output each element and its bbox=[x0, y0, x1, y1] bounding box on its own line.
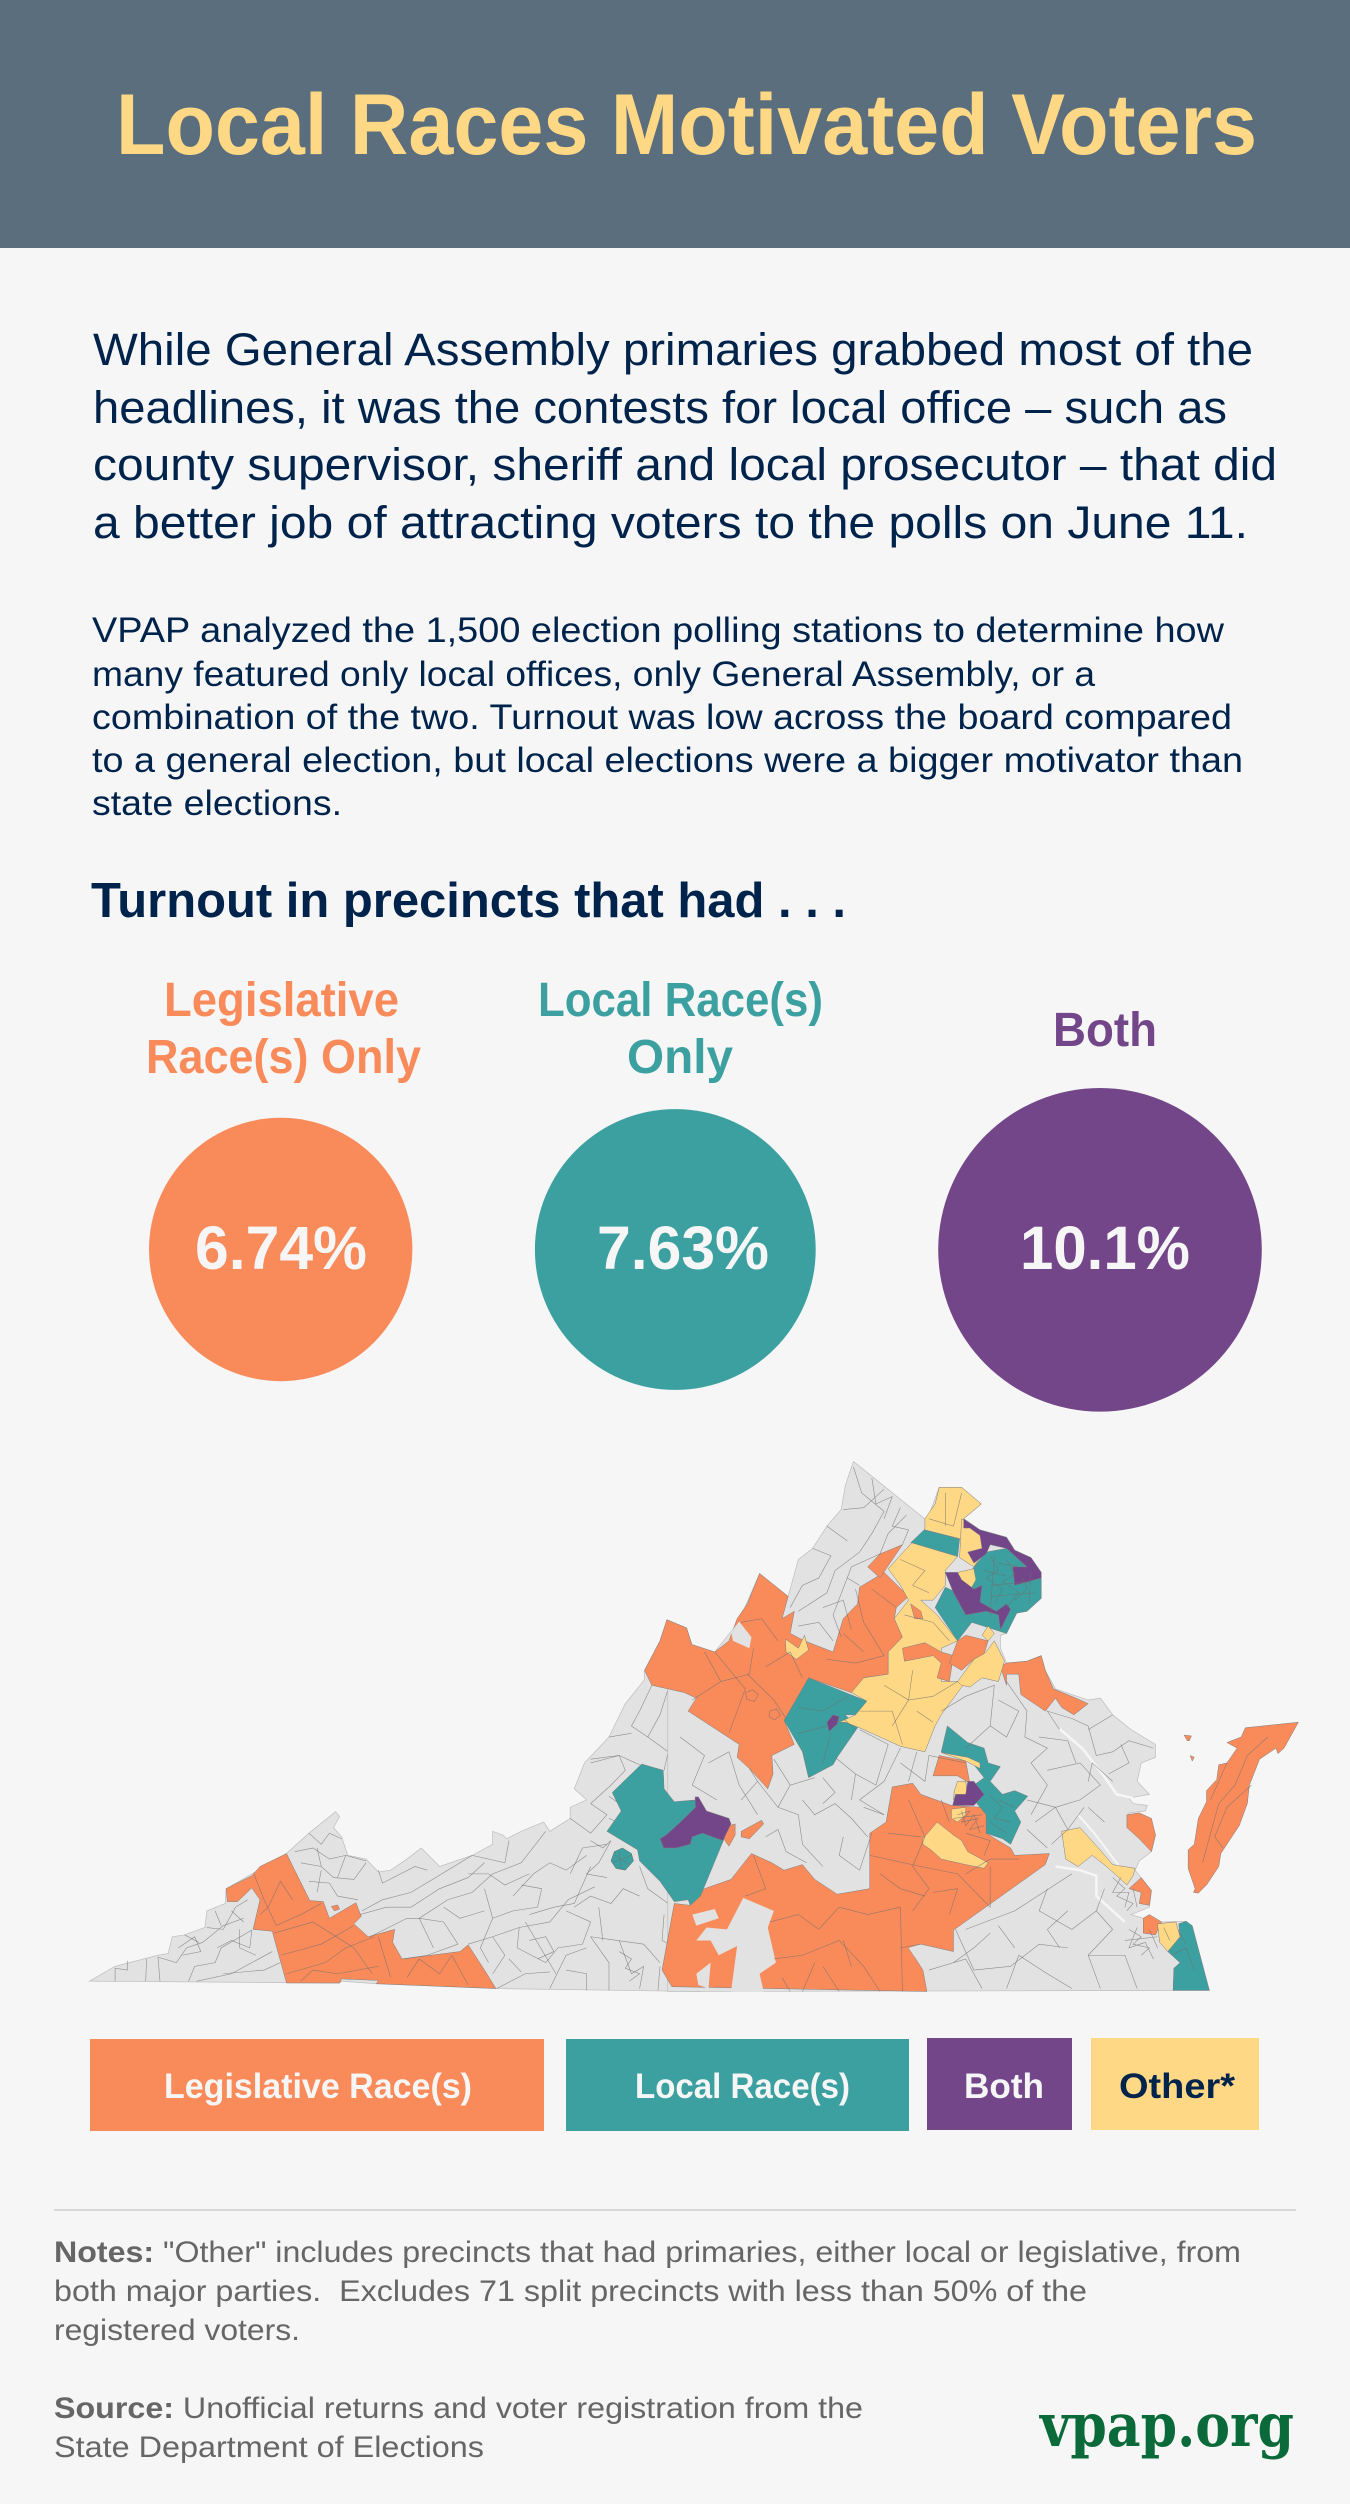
title: Local Races Motivated Voters bbox=[116, 77, 1257, 173]
region: base west bbox=[89, 1620, 700, 1992]
circle: 6.74% bbox=[149, 1118, 412, 1381]
region: legislative over other bbox=[902, 1604, 988, 1682]
logo: vpap.org: vpap.org bbox=[1038, 2391, 1294, 2461]
stat: both bbox=[938, 1004, 1262, 1412]
region: legislative races bbox=[644, 1545, 1298, 1992]
source: State Department of Elections bbox=[54, 2431, 484, 2464]
legend: other: Other* bbox=[1119, 2067, 1235, 2106]
label: local bbox=[538, 974, 823, 1084]
eastern half of the state bbox=[607, 1461, 1298, 1992]
methodology paragraph: state elections. bbox=[92, 784, 342, 823]
region: gray pockets in southside bbox=[692, 1622, 923, 1992]
intro paragraph bbox=[93, 324, 1277, 548]
methodology paragraph: combination of the two. Turnout was low across the board compared bbox=[92, 698, 1232, 737]
source: Source: Unofficial returns and voter registration from the bbox=[54, 2392, 863, 2425]
precinct lines east bbox=[680, 1467, 1268, 1992]
region: water rivers bbox=[1056, 1729, 1133, 1922]
intro paragraph: a better job of attracting voters to the polls on June 11. bbox=[93, 497, 1248, 548]
notes bbox=[54, 2236, 1241, 2347]
legend: other bbox=[1091, 2038, 1259, 2130]
region: base east bbox=[668, 1461, 1209, 1992]
notes: both major parties. Excludes 71 split precincts with less than 50% of the bbox=[54, 2275, 1087, 2308]
notes: Notes: "Other" includes precincts that had primaries, either local or legislative, from bbox=[54, 2236, 1241, 2269]
circle: 10.1% bbox=[938, 1088, 1262, 1412]
intro paragraph: While General Assembly primaries grabbed most of the bbox=[93, 324, 1253, 375]
value: 6.74%: 6.74% bbox=[195, 1214, 367, 1282]
legend: both: Both bbox=[964, 2067, 1044, 2106]
stat: local races only bbox=[535, 974, 823, 1390]
methodology paragraph: many featured only local offices, only General Assembly, or a bbox=[92, 655, 1096, 694]
intro paragraph: headlines, it was the contests for local office – such as bbox=[93, 382, 1227, 433]
legend: both bbox=[927, 2038, 1072, 2130]
label: local: Local Race(s) bbox=[538, 974, 823, 1027]
methodology paragraph: VPAP analyzed the 1,500 election polling stations to determine how bbox=[92, 611, 1225, 650]
source bbox=[54, 2392, 863, 2464]
label: legislative: Legislative bbox=[164, 974, 399, 1027]
region: other races bbox=[785, 1487, 1180, 1952]
region: both races bbox=[660, 1519, 1041, 1848]
region: local dot bbox=[611, 1848, 633, 1870]
methodology paragraph bbox=[92, 611, 1243, 823]
legend: legislative races bbox=[90, 2039, 544, 2131]
footer divider bbox=[54, 2209, 1296, 2211]
section heading: Turnout in precincts that had . . . bbox=[91, 874, 846, 928]
legend: legislative races: Legislative Race(s) bbox=[164, 2067, 472, 2106]
legend bbox=[90, 2038, 1259, 2131]
label: local: Only bbox=[627, 1031, 733, 1084]
map of Virginia precincts bbox=[89, 1461, 1298, 1992]
legend: local races bbox=[566, 2039, 909, 2131]
value: 7.63%: 7.63% bbox=[597, 1214, 769, 1282]
label: both: Both bbox=[1053, 1004, 1157, 1057]
stat: legislative races only bbox=[146, 974, 421, 1381]
notes: registered voters. bbox=[54, 2314, 300, 2347]
circle: 7.63% bbox=[535, 1109, 816, 1390]
region: local races bbox=[607, 1529, 1209, 1990]
header banner bbox=[0, 0, 1350, 248]
precinct lines west bbox=[115, 1637, 700, 1990]
label: legislative bbox=[146, 974, 421, 1084]
region: legislative southwest bbox=[226, 1854, 496, 1989]
methodology paragraph: to a general election, but local elections were a bigger motivator than bbox=[92, 741, 1243, 780]
label: legislative: Race(s) Only bbox=[146, 1031, 421, 1084]
legend: local races: Local Race(s) bbox=[635, 2067, 850, 2106]
western half of the state bbox=[89, 1620, 700, 1992]
intro paragraph: county supervisor, sheriff and local prosecutor – that did bbox=[93, 439, 1277, 490]
value: 10.1%: 10.1% bbox=[1020, 1214, 1190, 1282]
